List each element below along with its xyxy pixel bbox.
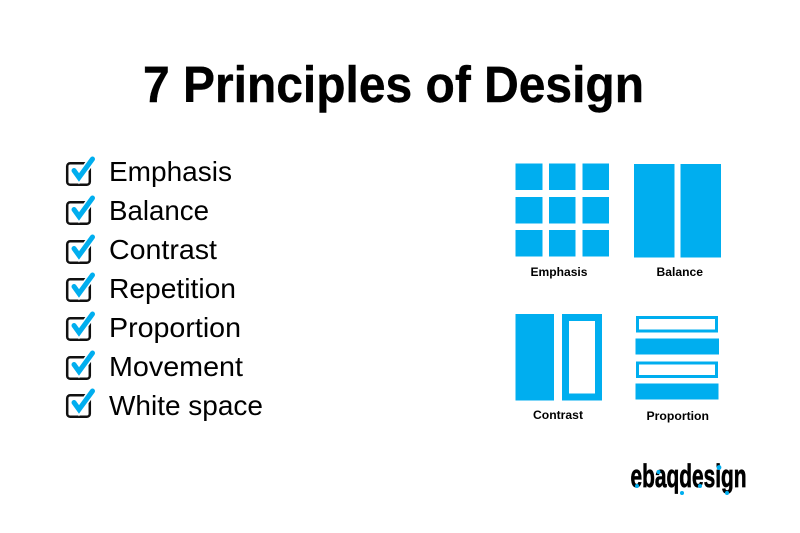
- item: Proportion: Proportion: [109, 312, 241, 343]
- label: Contrast: Contrast: [533, 408, 583, 422]
- diagram: Balance columns: [634, 164, 721, 258]
- diagram: Proportion bars: [636, 318, 719, 400]
- logo: ebaqdesign: [630, 458, 746, 495]
- label: Proportion: Proportion: [646, 409, 709, 423]
- diagram: Emphasis grid: [516, 164, 609, 256]
- item: Balance: [67, 195, 209, 226]
- checklist: [67, 156, 263, 421]
- item: Movement: Movement: [109, 351, 243, 382]
- item: Emphasis: Emphasis: [109, 156, 232, 187]
- title: 7 Principles of Design: [143, 56, 644, 113]
- item: White space: White space: [109, 390, 263, 421]
- item: Contrast: Contrast: [109, 234, 217, 265]
- item: Balance: Balance: [109, 195, 209, 226]
- diagram: Contrast columns: [516, 314, 598, 400]
- label: Balance: Balance: [656, 265, 703, 279]
- label: Emphasis: Emphasis: [530, 265, 588, 279]
- item: Repetition: Repetition: [109, 273, 236, 304]
